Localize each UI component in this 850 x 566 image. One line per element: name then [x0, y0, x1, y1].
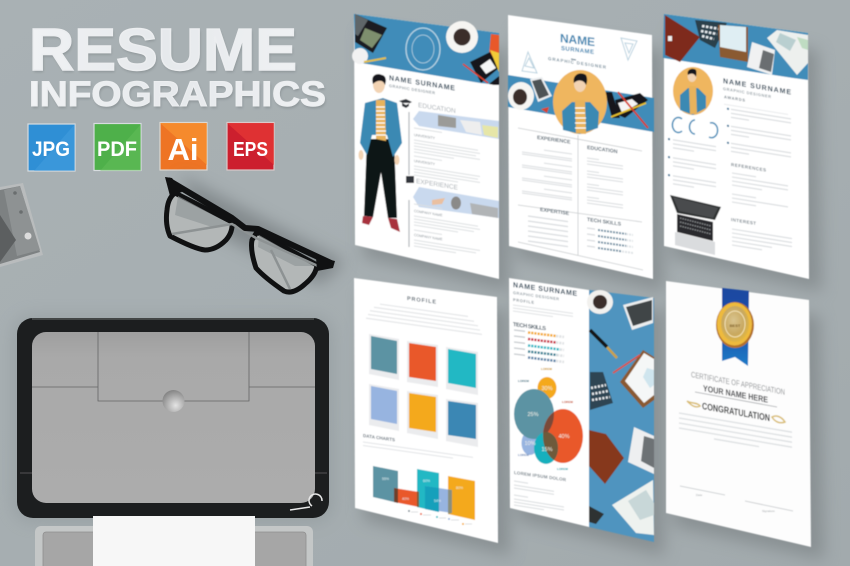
- blue band: [508, 75, 654, 132]
- swatches: [371, 336, 476, 439]
- experience entries: [414, 204, 480, 257]
- stapler at left edge: [0, 183, 43, 267]
- signature lines: Signature: [762, 509, 775, 513]
- experience image band: [413, 187, 499, 218]
- shoes: [362, 216, 400, 232]
- lorem section: [514, 470, 567, 513]
- chart legend: [408, 510, 472, 525]
- trousers: [364, 139, 397, 218]
- coffee cup: [446, 21, 478, 53]
- medal: BEST: [730, 323, 741, 328]
- data charts heading: [363, 433, 473, 461]
- timeline: [408, 112, 410, 175]
- sheet: [666, 281, 811, 547]
- title shadow: [30, 19, 327, 116]
- tablet corner: [589, 506, 604, 524]
- badge: EPS: [227, 122, 274, 170]
- head: [373, 75, 385, 93]
- badge: PDF: [94, 124, 141, 171]
- lid seams: [20, 332, 327, 473]
- glasses shadow: [180, 175, 345, 285]
- character: [358, 74, 402, 232]
- title: [29, 17, 327, 116]
- bar values: [382, 477, 463, 503]
- education image band: [413, 111, 499, 139]
- badge: Ai: [160, 122, 207, 170]
- experience column: [522, 135, 572, 200]
- pen and notebook: [605, 92, 648, 128]
- profile heading: PROFILE: [407, 296, 436, 306]
- title shadow: RESUME: [30, 19, 298, 85]
- blue side panel: [589, 290, 654, 542]
- signature lines: [680, 486, 793, 513]
- venn callouts: [518, 367, 573, 471]
- references: [731, 162, 788, 211]
- name block: NAME SURNAME: [723, 78, 791, 97]
- page: profile charts: [354, 278, 498, 543]
- skill labels: [514, 330, 525, 355]
- name block: AWARDS: [724, 94, 745, 103]
- top bar: [168, 180, 333, 264]
- printer body: [17, 318, 329, 518]
- swatch cards: [369, 334, 478, 447]
- education section: [399, 99, 499, 186]
- certificate title: CERTIFICATE OF APPRECIATION: [691, 370, 785, 397]
- phone: [530, 77, 552, 102]
- name block: [723, 78, 791, 111]
- rule: [695, 392, 777, 407]
- intro text: [366, 302, 482, 334]
- sheet: [354, 278, 498, 543]
- education entries: UNIVERSITY: [414, 133, 436, 140]
- expertise column: EXPERTISE: [540, 207, 570, 217]
- briefcase: [665, 15, 700, 62]
- education column: EDUCATION: [587, 145, 618, 155]
- header logo: [406, 28, 440, 70]
- pencil: [613, 355, 640, 373]
- overlap: teal and red: [542, 412, 554, 433]
- title shadow: INFOGRAPHICS: [30, 77, 327, 116]
- name heading: NAME: [560, 31, 595, 49]
- name block: PROFILE: [513, 297, 534, 305]
- triangle logos: [522, 38, 637, 73]
- lorem section: LOREM IPSUM DOLOR: [514, 470, 567, 482]
- hair: [372, 74, 386, 85]
- paper sheet: [93, 516, 255, 566]
- portrait: [673, 67, 713, 115]
- education column: [587, 145, 623, 208]
- experience column: EXPERIENCE: [537, 135, 571, 146]
- experience entries: COMPANY NAME: [414, 209, 443, 218]
- printer: [12, 315, 334, 566]
- experience heading: EXPERIENCE: [416, 178, 458, 192]
- page: certificate: [666, 281, 811, 547]
- badge: PDF: PDF: [97, 138, 137, 161]
- badge: JPG: [28, 124, 75, 171]
- name heading: [548, 31, 607, 70]
- bar values: 60%: [423, 479, 430, 483]
- sheet: [354, 14, 499, 279]
- page: tech skills venn: [509, 278, 654, 542]
- name block: GRAPHIC DESIGNER: [723, 86, 771, 99]
- page: character resume: [352, 14, 499, 279]
- experience icon: [406, 176, 414, 183]
- venn values: 40%: [558, 434, 570, 440]
- clock and pencil: [352, 48, 386, 64]
- printer lid: [32, 332, 315, 503]
- progress rings: [672, 118, 718, 138]
- skill ratings: [528, 332, 564, 362]
- sheet: [509, 278, 589, 527]
- book: [718, 25, 748, 62]
- top highlight: [32, 318, 314, 320]
- medal: [716, 302, 754, 348]
- red object: [541, 107, 549, 113]
- bar chart: [373, 466, 475, 520]
- certificate body: [679, 413, 792, 452]
- sheet: [664, 14, 809, 279]
- venn values: 25%: [527, 412, 539, 418]
- overlap: cyan and red: [542, 432, 559, 460]
- papers: [767, 30, 808, 75]
- printer shadow: [12, 315, 334, 523]
- education heading: EDUCATION: [418, 102, 456, 115]
- calculator: [590, 372, 613, 410]
- expertise column: [528, 207, 570, 247]
- tech skills column: TECH SKILLS: [587, 217, 622, 228]
- format badges: [28, 122, 274, 171]
- name block: NAME SURNAME: [389, 75, 455, 93]
- key mark: [290, 494, 322, 510]
- venn callouts: LOREM: [562, 400, 573, 404]
- venn callouts: LOREM: [541, 367, 552, 371]
- bar values: 80%: [456, 486, 463, 490]
- education icon: [399, 99, 412, 108]
- jacket: [360, 98, 402, 157]
- lens tint: [175, 196, 314, 266]
- name block: [513, 282, 577, 320]
- page shadows: [362, 30, 824, 560]
- name block: GRAPHIC DESIGNER: [513, 290, 559, 301]
- congratulation: CONGRATULATION: [702, 401, 770, 424]
- venn values: 10%: [524, 441, 536, 447]
- coffee: [587, 290, 613, 314]
- flourishes: [687, 401, 785, 423]
- portrait: [553, 70, 607, 134]
- venn callouts: LOREM: [518, 379, 529, 383]
- timeline: [408, 200, 410, 247]
- badge: Ai: Ai: [168, 132, 198, 167]
- name block: NAME SURNAME: [513, 282, 577, 298]
- side panel objects: [587, 290, 654, 535]
- paper tray: [35, 526, 313, 566]
- venn callouts: LOREM: [557, 467, 568, 471]
- tech skills column: [587, 217, 633, 253]
- desk objects: [463, 34, 499, 85]
- recipient name: YOUR NAME HERE: [703, 383, 768, 405]
- temples: [172, 224, 318, 289]
- badge: EPS: EPS: [233, 139, 268, 161]
- sheet: [508, 15, 653, 279]
- venn values: 15%: [541, 447, 553, 453]
- bar values: 40%: [402, 497, 409, 501]
- blue header: [354, 14, 499, 85]
- phone: [628, 427, 654, 474]
- title line one: RESUME: [29, 17, 297, 83]
- title line two: INFOGRAPHICS: [29, 75, 326, 114]
- badge: JPG: JPG: [32, 138, 70, 161]
- page: awards resume: [663, 14, 809, 279]
- tech skills: [513, 322, 564, 362]
- education entries: [414, 128, 480, 186]
- keyboard: [623, 297, 653, 330]
- hands: [358, 150, 400, 165]
- experience entries: COMPANY NAME: [414, 233, 443, 242]
- left list: [668, 138, 716, 191]
- clipboard: [620, 350, 654, 408]
- name heading: GRAPHIC DESIGNER: [548, 56, 607, 70]
- bar values: 54%: [434, 499, 441, 503]
- phone: [747, 42, 775, 75]
- page: two column resume: [508, 15, 654, 279]
- lenses: [166, 193, 317, 292]
- venn callouts: LOREM: [518, 453, 529, 457]
- interest: [731, 217, 792, 255]
- tech skills: TECH SKILLS: [513, 322, 546, 332]
- name heading: SURNAME: [561, 46, 594, 56]
- dividers: [518, 128, 643, 270]
- calculator: [355, 14, 387, 53]
- blue header: [663, 14, 808, 80]
- papers: [612, 480, 654, 535]
- coffee: [508, 82, 534, 110]
- data charts heading: DATA CHARTS: [363, 433, 395, 442]
- venn values: [524, 386, 570, 453]
- fountain pen: [590, 330, 617, 358]
- references: REFERENCES: [731, 162, 766, 173]
- education entries: UNIVERSITY: [414, 159, 436, 166]
- awards list: [724, 104, 791, 161]
- signature lines: Date: [696, 493, 703, 497]
- interest: INTEREST: [731, 217, 756, 226]
- name block: GRAPHIC DESIGNER: [389, 83, 435, 95]
- lid button: [162, 390, 184, 412]
- ribbon: [722, 288, 749, 366]
- shirt: [376, 100, 386, 141]
- bar values: 55%: [382, 477, 389, 481]
- laptop: [670, 195, 721, 255]
- venn chart: [514, 367, 583, 471]
- briefcase: [589, 430, 624, 484]
- venn values: 30%: [541, 386, 553, 392]
- experience section: [406, 176, 499, 257]
- hinges: [165, 177, 335, 271]
- glasses: [165, 175, 345, 292]
- calculator: [695, 20, 727, 48]
